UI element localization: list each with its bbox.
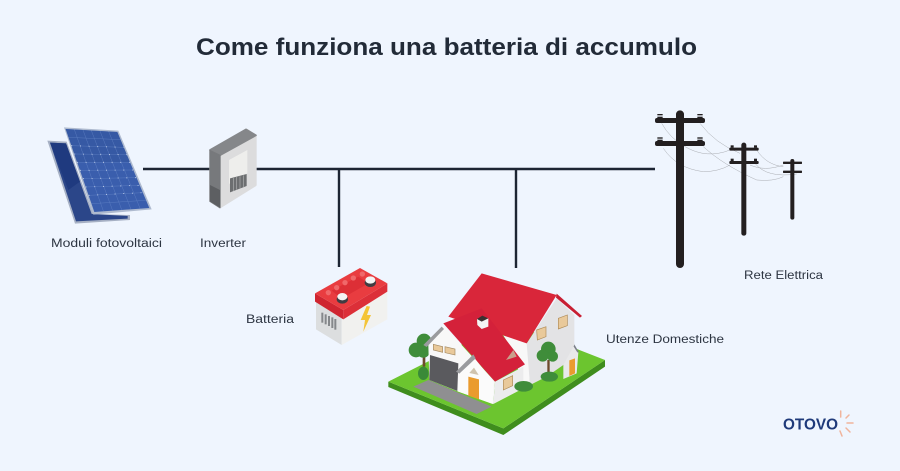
label: batteria: Batteria bbox=[246, 314, 295, 326]
label: utenze domestiche: Utenze Domestiche bbox=[606, 334, 724, 346]
icon: solar panels bbox=[47, 127, 152, 224]
left tree bbox=[423, 355, 425, 367]
icon: electricity poles bbox=[655, 110, 802, 268]
icon: inverter bbox=[210, 129, 256, 208]
porch bbox=[458, 357, 493, 404]
driveway bbox=[413, 380, 492, 414]
icon: battery bbox=[315, 268, 387, 345]
title: Come funziona una batteria di accumulo bbox=[196, 34, 697, 61]
annex bbox=[563, 345, 578, 379]
right tree and bushes bbox=[547, 360, 550, 373]
logo: otovo: OTOVO bbox=[783, 416, 838, 434]
icon: house bbox=[388, 273, 605, 435]
front wing roof bbox=[443, 308, 525, 382]
main wall bbox=[500, 330, 530, 389]
connection lines bbox=[143, 169, 655, 268]
label: moduli fotovoltaici: Moduli fotovoltaici bbox=[51, 238, 162, 250]
label: inverter: Inverter bbox=[200, 238, 246, 250]
main roof bbox=[448, 273, 557, 343]
chimney bbox=[477, 318, 488, 329]
front wing walls bbox=[428, 325, 495, 404]
logo: otovo bbox=[783, 411, 853, 436]
label: rete elettrica: Rete Elettrica bbox=[744, 270, 824, 282]
ground bbox=[388, 360, 605, 435]
